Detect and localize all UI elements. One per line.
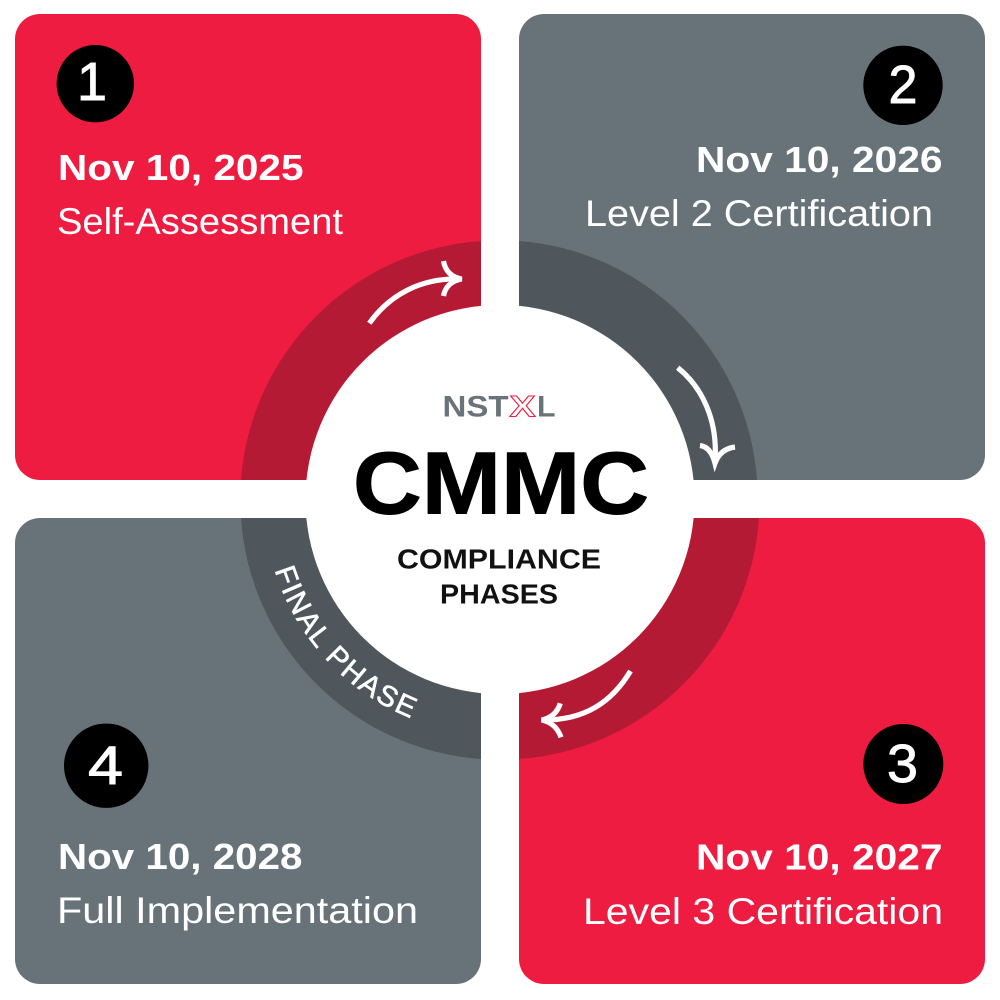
panel background red [519,518,985,984]
number badge 2: 2 [888,55,918,115]
number badge 4: 4 [88,736,123,796]
panel background grey [519,14,985,480]
number badge 3: 3 [887,734,918,794]
ring segment: final phase [241,518,481,759]
label: Level 3 Certification: Level 3 Certification [583,891,943,932]
label: Level 2 Certification: Level 2 Certification [585,193,933,234]
panel background grey [15,518,481,984]
logo: NSTXL [442,390,556,424]
number badge 1 [57,45,134,122]
ring segment: phase 2 [519,241,757,480]
logo: NSTXL: NST [442,390,508,424]
arrow: phase 1 to 2 [369,261,462,323]
panel: phase 4 [15,518,481,984]
number badge 4 [64,724,148,808]
panel background red [15,14,481,480]
heading: CMMC: CMMC [353,434,649,532]
date: Nov 10, 2025: Nov 10, 2025 [58,147,304,188]
curved label: FINAL PHASE: FINAL PHASE [274,565,418,718]
panel: phase 1 [15,14,481,480]
date: Nov 10, 2027: Nov 10, 2027 [696,836,942,878]
panel: phase 3 [519,518,985,984]
date: Nov 10, 2026: Nov 10, 2026 [696,139,942,180]
subheading: PHASES: PHASES [440,578,558,610]
date: Nov 10, 2028: Nov 10, 2028 [58,836,302,877]
panel: phase 2 [519,14,985,480]
label: Self-Assessment: Self-Assessment [57,201,344,242]
ring segment: phase 1 [241,241,481,480]
center white circle [306,305,694,694]
number badge 3 [863,724,943,804]
number badge 1: 1 [77,52,107,112]
subheading: COMPLIANCE: COMPLIANCE [397,544,601,574]
center title block [353,390,649,610]
label: Full Implementation: Full Implementation [57,890,418,931]
number badge 2 [863,46,943,125]
ring segment: phase 3 [519,518,759,759]
arrow: phase 2 to 3 [678,368,735,463]
arrow: phase 3 to 4 [542,671,630,737]
logo: NSTXL: L [537,390,556,424]
logo: NSTXL: X [510,390,536,424]
